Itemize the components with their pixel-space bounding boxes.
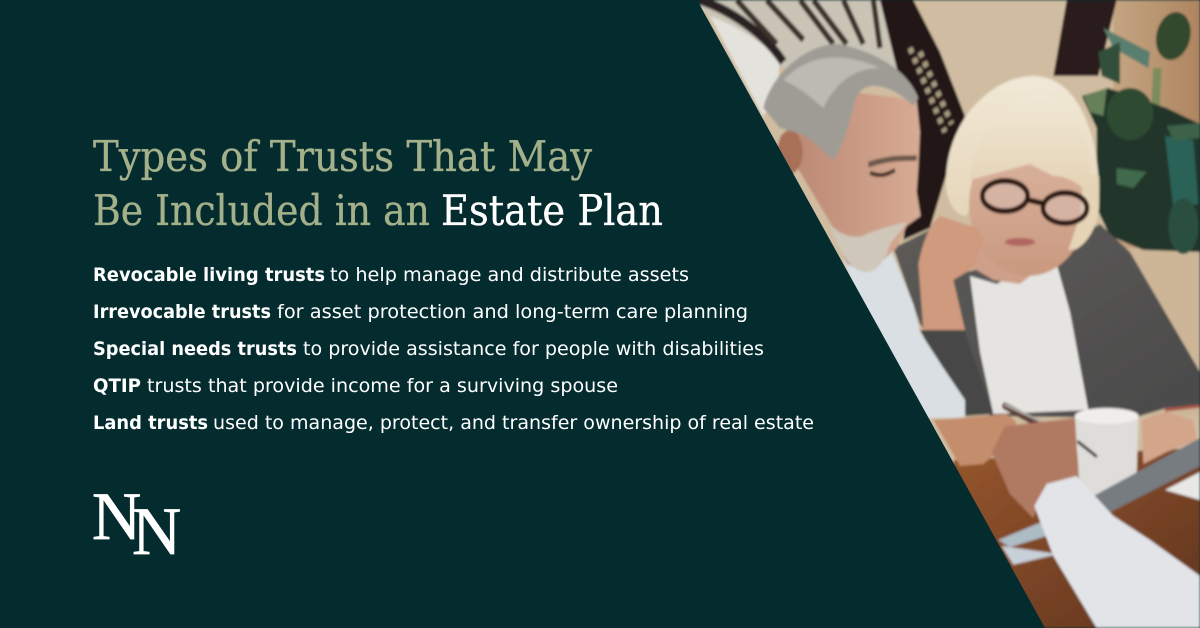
title line 2: Be Included in an (93, 186, 430, 235)
plant (1082, 5, 1200, 254)
cardigan sleeve (920, 328, 993, 416)
woman glasses (982, 181, 1087, 223)
woman hand on cheek (918, 216, 983, 330)
tablet (998, 438, 1200, 547)
list of trust types (93, 264, 814, 434)
item: QTIP trusts: trusts that provide income for a surviving spouse (147, 375, 618, 397)
item: revocable living trusts: Revocable living trusts (93, 264, 325, 286)
logo: NN monogram: N (132, 493, 181, 569)
wall background (700, 0, 1200, 628)
man brow and eye (868, 158, 917, 175)
red bracelet (1165, 406, 1200, 410)
man head (780, 92, 921, 272)
photo: couple reviewing documents (700, 0, 1200, 628)
woman cardigan (893, 224, 1200, 418)
item: revocable living trusts (93, 264, 689, 286)
woman neck (973, 240, 1053, 284)
woman lips (1005, 238, 1035, 246)
dark post (1053, 0, 1117, 76)
title (93, 132, 663, 235)
woman right hand (1142, 412, 1197, 464)
woman t-shirt (970, 252, 1088, 414)
man hair highlight (783, 58, 880, 108)
woman hair side (1068, 172, 1099, 250)
pen (1005, 405, 1096, 456)
man hair (763, 44, 918, 160)
table (953, 448, 1200, 628)
item: irrevocable trusts: for asset protection and long-term care planning (277, 301, 748, 323)
item: irrevocable trusts: Irrevocable trusts (93, 301, 271, 323)
item: special needs trusts: to provide assistance for people with disabilities (303, 338, 764, 360)
woman face (969, 132, 1088, 276)
logo: NN monogram (92, 478, 181, 569)
man hand on table (933, 414, 1017, 466)
mug (1075, 408, 1139, 496)
woman hair (946, 76, 1099, 251)
man beard (830, 222, 907, 272)
title highlight: Estate Plan (441, 186, 663, 235)
item: QTIP trusts: QTIP (93, 375, 141, 397)
logo: NN monogram: N (92, 478, 141, 554)
woman bangs (970, 94, 1091, 196)
title line 1: Types of Trusts That May (93, 132, 592, 181)
white sleeve (1034, 476, 1200, 628)
paper bottom (1002, 546, 1058, 565)
front hand (992, 418, 1078, 518)
man shirt (843, 248, 965, 418)
man ear (777, 130, 803, 174)
paper right (1165, 472, 1200, 500)
item: land trusts: used to manage, protect, and transfer ownership of real estate (213, 412, 814, 434)
item: special needs trusts (93, 338, 764, 360)
item: special needs trusts: Special needs trusts (93, 338, 297, 360)
item: land trusts: Land trusts (93, 412, 208, 434)
chair (700, 0, 965, 240)
item: revocable living trusts: to help manage and distribute assets (330, 264, 689, 286)
